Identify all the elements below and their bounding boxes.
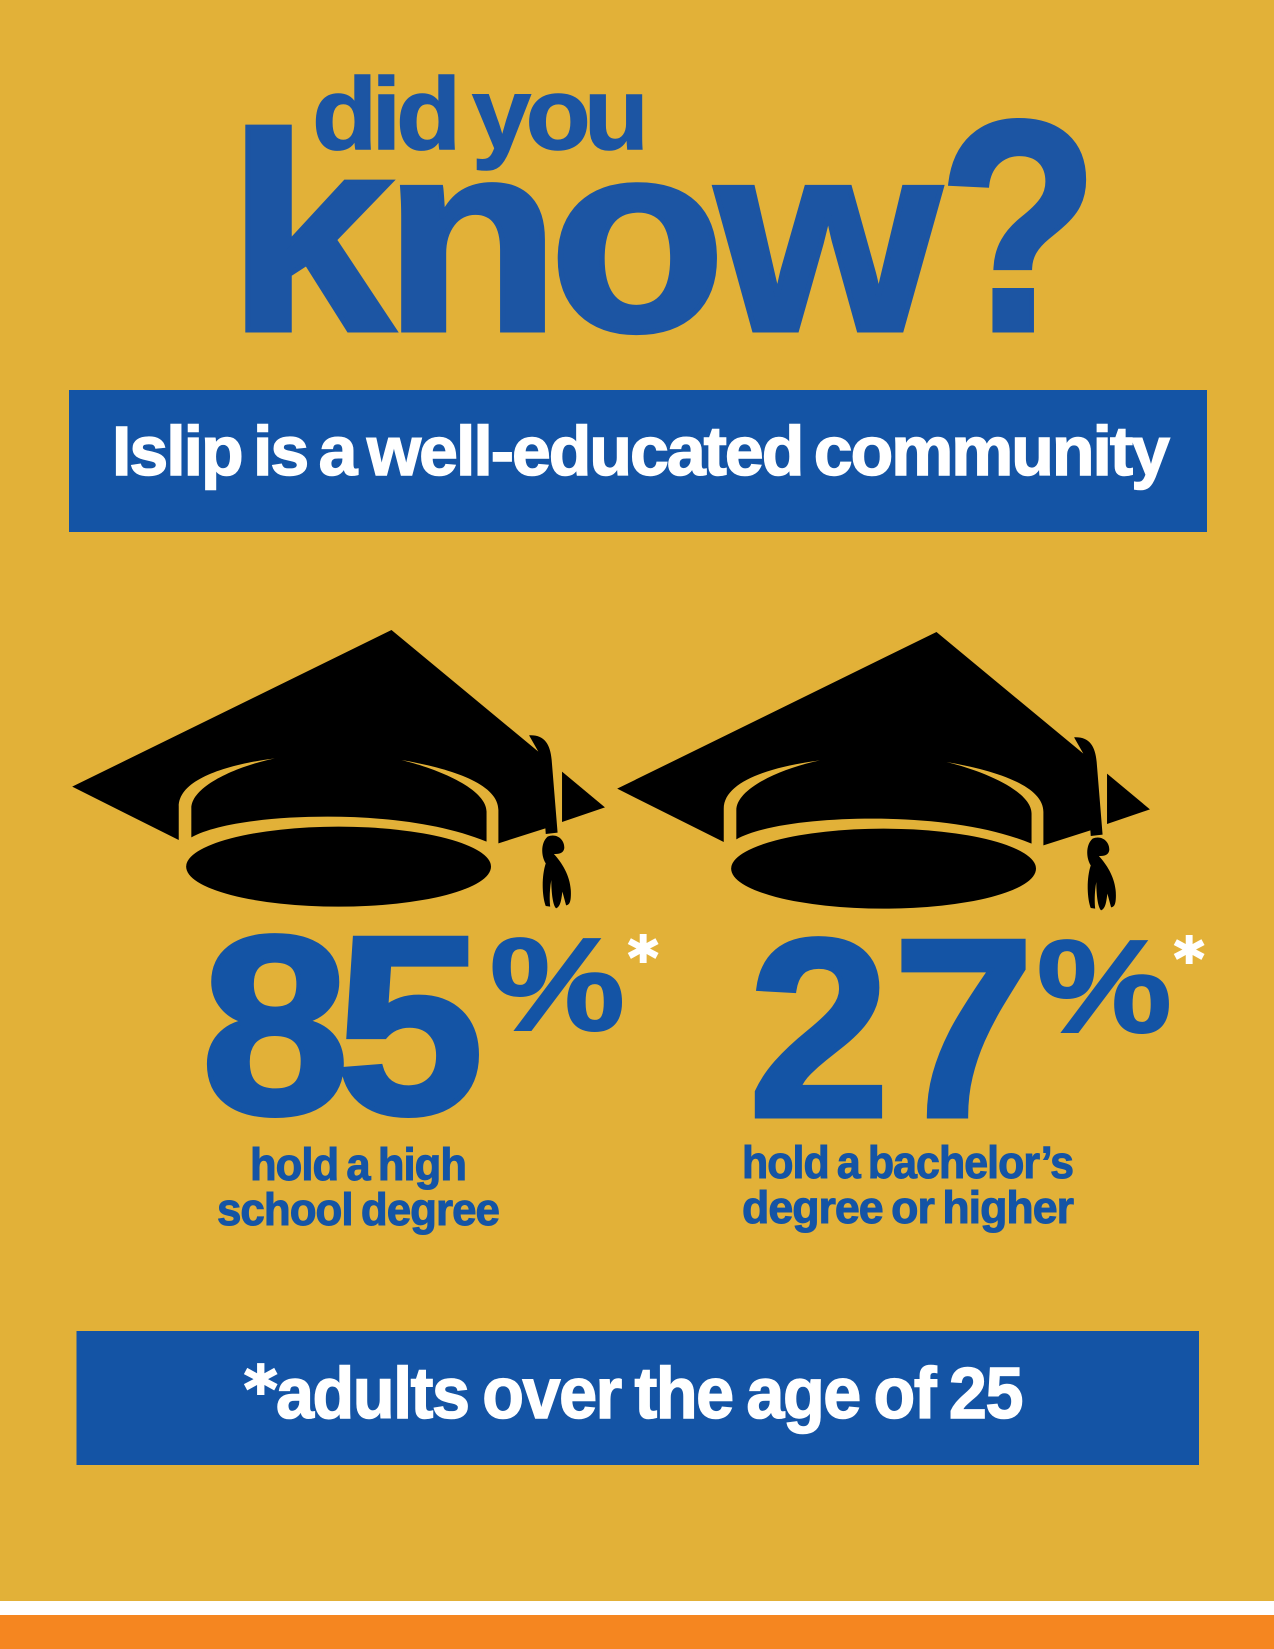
label: hold a bachelor's degree or higher	[742, 1137, 1073, 1233]
title: did you know?	[227, 58, 1099, 394]
label: hold a bachelor's degree or higher: degree or higher	[742, 1182, 1073, 1233]
banner: Islip is a well-educated community	[69, 390, 1207, 532]
statistic: 27%	[748, 886, 1204, 1170]
title line: did you: did you	[312, 58, 649, 172]
title question mark: ?	[938, 59, 1099, 394]
label: hold a high school degree	[217, 1139, 499, 1235]
percent sign: %	[1037, 913, 1172, 1061]
percent sign: %	[490, 911, 625, 1059]
footnote text: adults over the age of 25	[276, 1354, 1022, 1434]
label: hold a bachelor's degree or higher: hold a bachelor’s	[742, 1137, 1073, 1188]
number 85: 85	[201, 884, 484, 1168]
icon: graduation cap right	[617, 632, 1150, 910]
orange footer bar	[0, 1615, 1274, 1649]
number 27: 27	[748, 886, 1034, 1170]
white footer stripe	[0, 1601, 1274, 1615]
statistic: 85%	[201, 884, 658, 1168]
label: hold a high school degree: hold a high	[250, 1139, 466, 1190]
label: hold a high school degree: school degree	[217, 1184, 499, 1235]
title word: know: now	[384, 87, 942, 388]
footnote text: *	[244, 1354, 277, 1428]
icon: graduation cap left	[72, 630, 605, 908]
asterisk: *	[1174, 925, 1204, 993]
title word: know: k	[227, 78, 396, 390]
banner heading text: Islip is a well-educated community	[112, 412, 1170, 490]
asterisk: *	[628, 924, 658, 992]
footnote banner: adults over the age of 25	[76, 1331, 1199, 1465]
